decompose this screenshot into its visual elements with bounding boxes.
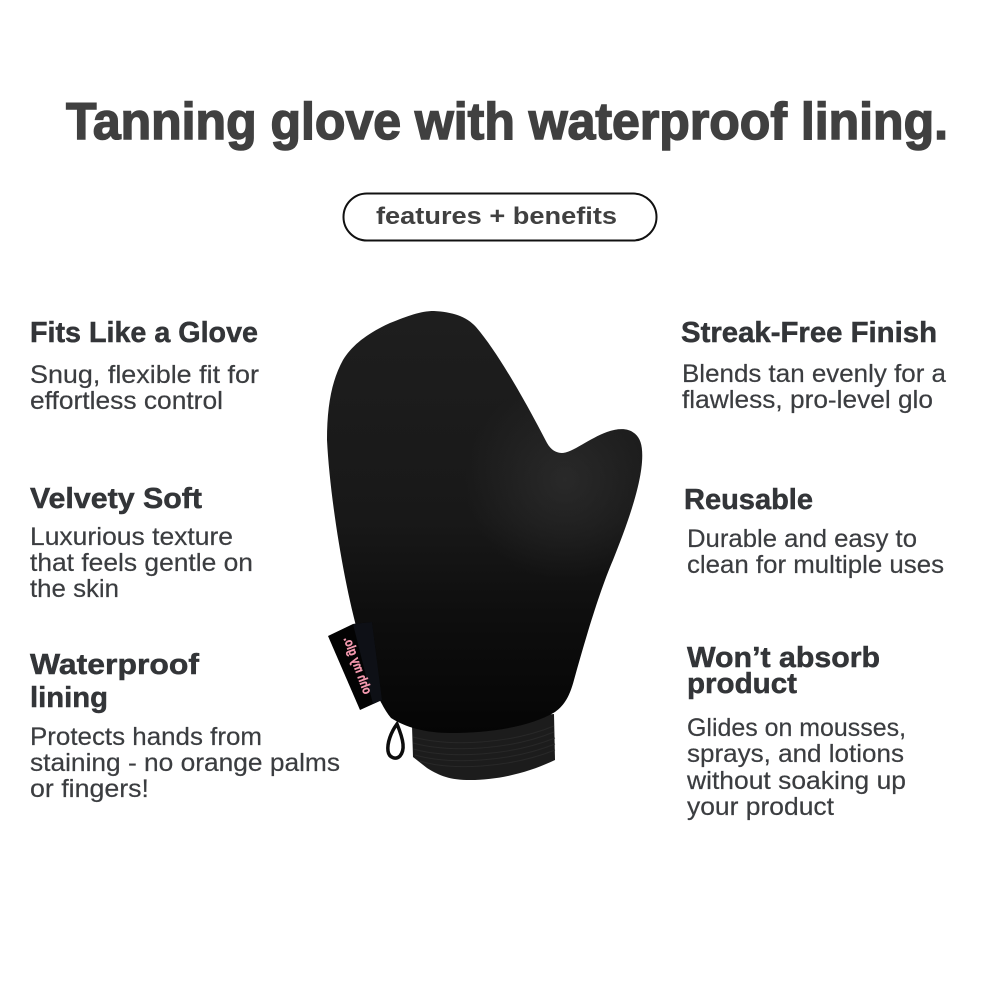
panel: left features: [30, 317, 340, 803]
feature: Streak-Free Finish: flawless, pro-level glo: [682, 386, 933, 414]
feature: Reusable: Reusable: [684, 484, 813, 516]
feature: Won't absorb product: without soaking up: [686, 767, 906, 795]
feature: Streak-Free Finish: Streak-Free Finish: [681, 317, 937, 349]
feature: Reusable: clean for multiple uses: [687, 551, 944, 579]
feature: Streak-Free Finish: Blends tan evenly for a: [682, 360, 946, 388]
feature: Won't absorb product: sprays, and lotions: [687, 740, 904, 768]
badge: features + benefits: [344, 194, 656, 240]
brand tag: [328, 622, 382, 710]
illustration: black tanning glove: [327, 311, 642, 780]
feature: Fits Like a Glove: effortless control: [30, 387, 223, 415]
title: Tanning glove with waterproof lining.: [66, 93, 948, 151]
feature: Won't absorb product: [686, 642, 906, 821]
feature: Fits Like a Glove: Snug, flexible fit for: [30, 361, 259, 389]
feature: Waterproof lining: staining - no orange palms: [30, 749, 340, 777]
feature: Fits Like a Glove: [30, 317, 259, 415]
feature: Fits Like a Glove: Fits Like a Glove: [30, 317, 258, 349]
feature: Won't absorb product: Won’t absorb: [687, 642, 880, 674]
feature: Velvety Soft: that feels gentle on: [30, 549, 253, 577]
feature: Streak-Free Finish: [681, 317, 946, 414]
feature: Velvety Soft: the skin: [30, 575, 119, 603]
feature: Velvety Soft: Velvety Soft: [30, 483, 202, 515]
glove loop: [388, 724, 403, 758]
feature: Won't absorb product: Glides on mousses,: [687, 714, 906, 742]
feature: Waterproof lining: Waterproof: [30, 649, 199, 681]
brand tag: ohh my glo.: [341, 635, 375, 696]
feature: Reusable: [684, 484, 944, 579]
panel: right features: [681, 317, 946, 821]
glove cuff: [412, 714, 555, 780]
feature: Waterproof lining: Protects hands from: [30, 723, 262, 751]
feature: Won't absorb product: product: [687, 668, 797, 700]
feature: Waterproof lining: lining: [30, 682, 108, 714]
feature: Velvety Soft: [30, 483, 253, 603]
glove body: [327, 311, 642, 733]
feature: Velvety Soft: Luxurious texture: [30, 523, 233, 551]
badge: features + benefits: features + benefits: [376, 203, 617, 230]
feature: Reusable: Durable and easy to: [687, 525, 917, 553]
feature: Won't absorb product: your product: [687, 793, 834, 821]
feature: Waterproof lining: [30, 649, 340, 803]
feature: Waterproof lining: or fingers!: [30, 775, 149, 803]
